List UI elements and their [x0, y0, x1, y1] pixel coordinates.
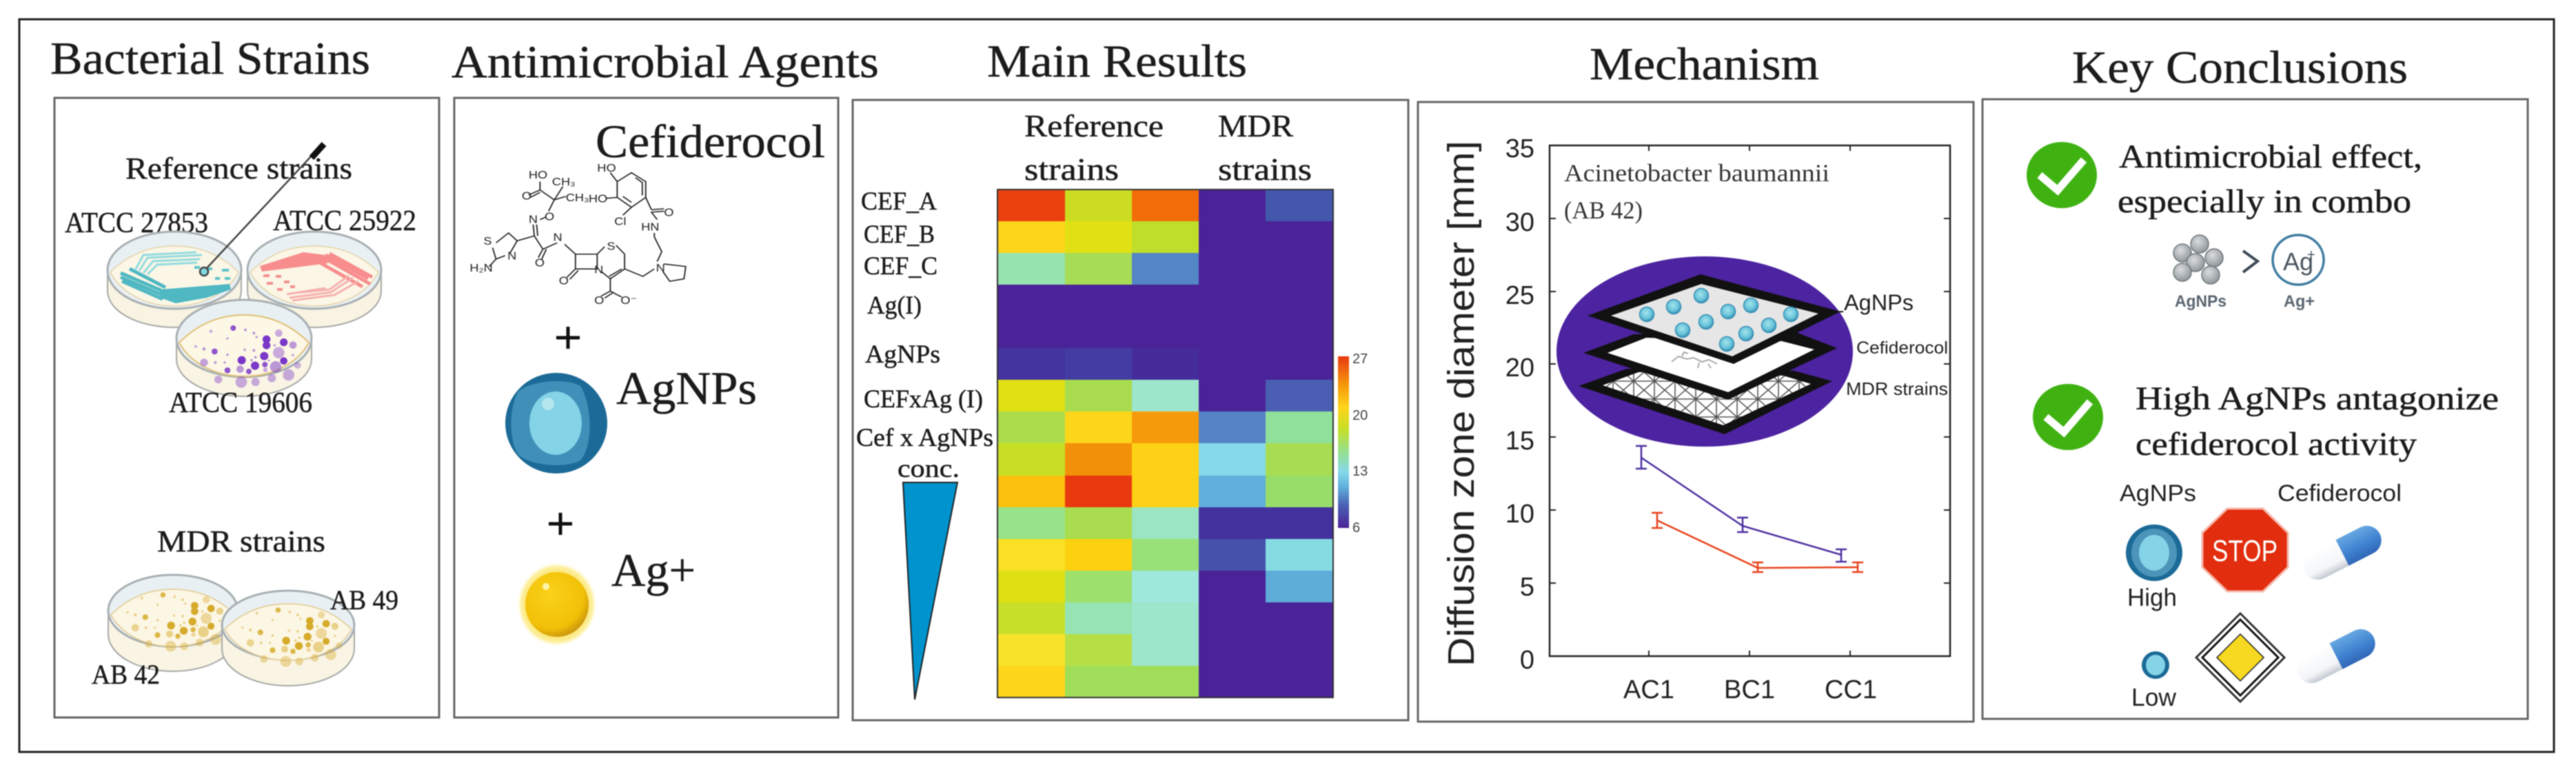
y axis title: Diffusion zone diameter [mm] — [1441, 141, 1482, 666]
row labels: Cef x AgNPs — [856, 424, 993, 452]
agent label: Ag+: Ag+ — [611, 544, 696, 596]
petri dish: ATCC 27853 teal streaks — [108, 232, 241, 327]
panel: key conclusions — [1982, 99, 2528, 719]
label: ATCC 25922: ATCC 25922 — [273, 205, 416, 237]
molecule: cefiderocol structure: O — [664, 207, 673, 218]
conclusion text 2: High AgNPs antagonize — [2136, 380, 2499, 417]
molecule: cefiderocol structure: HO — [529, 169, 547, 181]
title: Main Results: Main Results — [987, 36, 1247, 87]
heatmap — [997, 190, 1333, 697]
title: Antimicrobial Agents: Antimicrobial Agents — [452, 37, 879, 88]
label: AB 49: AB 49 — [330, 584, 398, 615]
line chart axes: BC1 — [1724, 675, 1775, 704]
agent label: Cefiderocol: Cefiderocol — [596, 115, 825, 167]
icon: capsule 1 — [2298, 521, 2386, 584]
panel: main results — [853, 100, 1408, 720]
petri dish: ATCC 19606 purple colonies — [176, 300, 312, 396]
column heading: MDR strains: strains — [1218, 152, 1312, 187]
panel: bacterial strains — [54, 98, 439, 717]
line chart axes: 10 — [1505, 500, 1534, 529]
column heading: reference strains: Reference — [1024, 108, 1164, 143]
label: ATCC 19606: ATCC 19606 — [169, 387, 312, 419]
molecule: cefiderocol structure: HN — [641, 221, 659, 233]
layer: AgNPs — [1588, 274, 1840, 364]
title: Mechanism: Mechanism — [1590, 39, 1819, 90]
label: AgNPs: AgNPs — [2120, 480, 2196, 507]
label: MDR strains: MDR strains — [1846, 378, 1948, 399]
colour bar: 20 — [1352, 408, 1368, 423]
icon: low AgNPs sphere — [2142, 651, 2169, 679]
molecule: cefiderocol structure: CH₃ — [552, 176, 576, 188]
icon: stop sign — [2202, 509, 2288, 591]
title: Key Conclusions: Key Conclusions — [2072, 42, 2408, 93]
row labels: CEF_B — [864, 221, 935, 249]
petri dish: AB 42 — [108, 575, 238, 671]
icon: stop sign: STOP — [2212, 534, 2278, 568]
series: red line with error bars — [1652, 513, 1863, 572]
molecule: cefiderocol structure: N — [553, 232, 562, 243]
label: Cefiderocol: Cefiderocol — [1856, 338, 1948, 358]
species label: Acinetobacter baumannii — [1564, 159, 1829, 187]
molecule: cefiderocol structure: O — [594, 294, 604, 307]
layer: cefiderocol — [1583, 331, 1837, 400]
icon: check mark 2 — [2033, 384, 2103, 450]
icon: Ag+ circle: + — [2307, 247, 2315, 263]
label: Ag+: Ag+ — [2284, 292, 2315, 311]
row labels: CEFxAg (I) — [864, 385, 983, 414]
molecule: cefiderocol structure: O — [559, 275, 569, 287]
column heading: MDR strains: MDR — [1218, 108, 1293, 143]
line chart axes: 20 — [1505, 354, 1534, 383]
molecule: cefiderocol structure: O⁻ — [620, 294, 637, 307]
molecule: cefiderocol structure: CH₃ — [566, 192, 589, 204]
icon: Ag+ sphere — [516, 562, 598, 647]
line chart axes: 0 — [1520, 646, 1534, 675]
label: High: High — [2127, 583, 2177, 611]
row labels — [856, 187, 993, 483]
row labels: conc. — [897, 455, 960, 483]
plus sign — [556, 327, 580, 349]
molecule: cefiderocol structure: S — [483, 235, 492, 247]
molecule: cefiderocol structure: O — [545, 210, 554, 223]
line chart axes: 25 — [1505, 281, 1534, 310]
colour bar: 27 — [1352, 352, 1368, 367]
mechanism diagram: layered sheets — [1556, 256, 1948, 447]
conclusion text 1: Antimicrobial effect, — [2119, 139, 2422, 175]
molecule: cefiderocol structure: HO — [589, 193, 607, 205]
row labels: Ag(I) — [867, 292, 922, 320]
molecule: cefiderocol structure: N — [594, 264, 603, 276]
molecule: cefiderocol structure: HO — [597, 162, 616, 174]
icon: high AgNPs sphere — [2126, 525, 2182, 581]
line chart axes: 5 — [1520, 573, 1534, 602]
icon: Ag+ circle: Ag — [2283, 247, 2313, 276]
icon: priority road sign — [2196, 613, 2284, 702]
row labels: AgNPs — [865, 340, 940, 369]
molecule: cefiderocol structure: N — [529, 214, 538, 225]
species label: (AB 42) — [1564, 196, 1643, 224]
line chart axes: 30 — [1505, 208, 1534, 237]
series: blue line with error bars — [1636, 446, 1847, 562]
row labels: CEF_C — [864, 252, 937, 281]
panel: antimicrobial agents — [454, 98, 838, 717]
molecule: cefiderocol structure: N — [656, 262, 665, 274]
conclusion text 1: especially in combo — [2118, 183, 2411, 220]
conclusion text 2: cefiderocol activity — [2136, 426, 2417, 462]
molecule: cefiderocol structure: O — [522, 190, 531, 202]
label: AgNPs: AgNPs — [1844, 290, 1914, 315]
title: Bacterial Strains: Bacterial Strains — [50, 33, 370, 84]
colour bar: 6 — [1352, 520, 1360, 536]
column heading: reference strains: strains — [1024, 152, 1119, 187]
leader line — [1818, 312, 1843, 314]
layer: MDR strains mesh — [1579, 369, 1832, 434]
icon: capsule 2 — [2292, 624, 2380, 688]
molecule: cefiderocol structure: H₂N — [469, 262, 493, 274]
petri dish: AB 49 — [222, 591, 354, 686]
label: ATCC 27853: ATCC 27853 — [65, 207, 208, 239]
label: Cefiderocol: Cefiderocol — [2278, 480, 2402, 507]
line chart axes — [1505, 134, 1950, 704]
line chart axes: 15 — [1505, 427, 1534, 456]
molecule: cefiderocol structure: O — [535, 257, 545, 269]
colour bar: 13 — [1352, 464, 1368, 479]
panel: mechanism — [1418, 102, 1974, 722]
molecule: cefiderocol structure: Cl — [614, 216, 626, 227]
plus sign — [549, 513, 572, 535]
heading: MDR strains: MDR strains — [157, 525, 325, 558]
greater-than arrow — [2243, 251, 2258, 272]
heading: reference strains: Reference strains — [125, 152, 352, 185]
row labels: CEF_A — [861, 187, 937, 216]
icon: AgNPs sphere — [505, 373, 607, 473]
concentration triangle — [903, 482, 957, 700]
icon: check mark 1 — [2027, 142, 2097, 208]
pipette loop — [200, 144, 324, 276]
petri dish: ATCC 25922 red streaks — [247, 232, 381, 327]
line chart axes: AC1 — [1623, 675, 1674, 704]
label: AB 42: AB 42 — [92, 659, 160, 690]
molecule: cefiderocol structure: S — [607, 240, 616, 252]
colour bar — [1338, 352, 1368, 536]
agent label: AgNPs: AgNPs — [616, 362, 757, 414]
line chart axes: CC1 — [1825, 675, 1877, 704]
icon: Ag+ circle — [2273, 235, 2324, 285]
molecule: cefiderocol structure: N — [507, 250, 516, 262]
icon: AgNPs cluster — [2173, 235, 2223, 284]
line chart axes: 35 — [1505, 134, 1534, 163]
label: Low: Low — [2131, 683, 2177, 711]
label: AgNPs: AgNPs — [2175, 292, 2227, 311]
molecule: cefiderocol structure — [469, 162, 686, 307]
